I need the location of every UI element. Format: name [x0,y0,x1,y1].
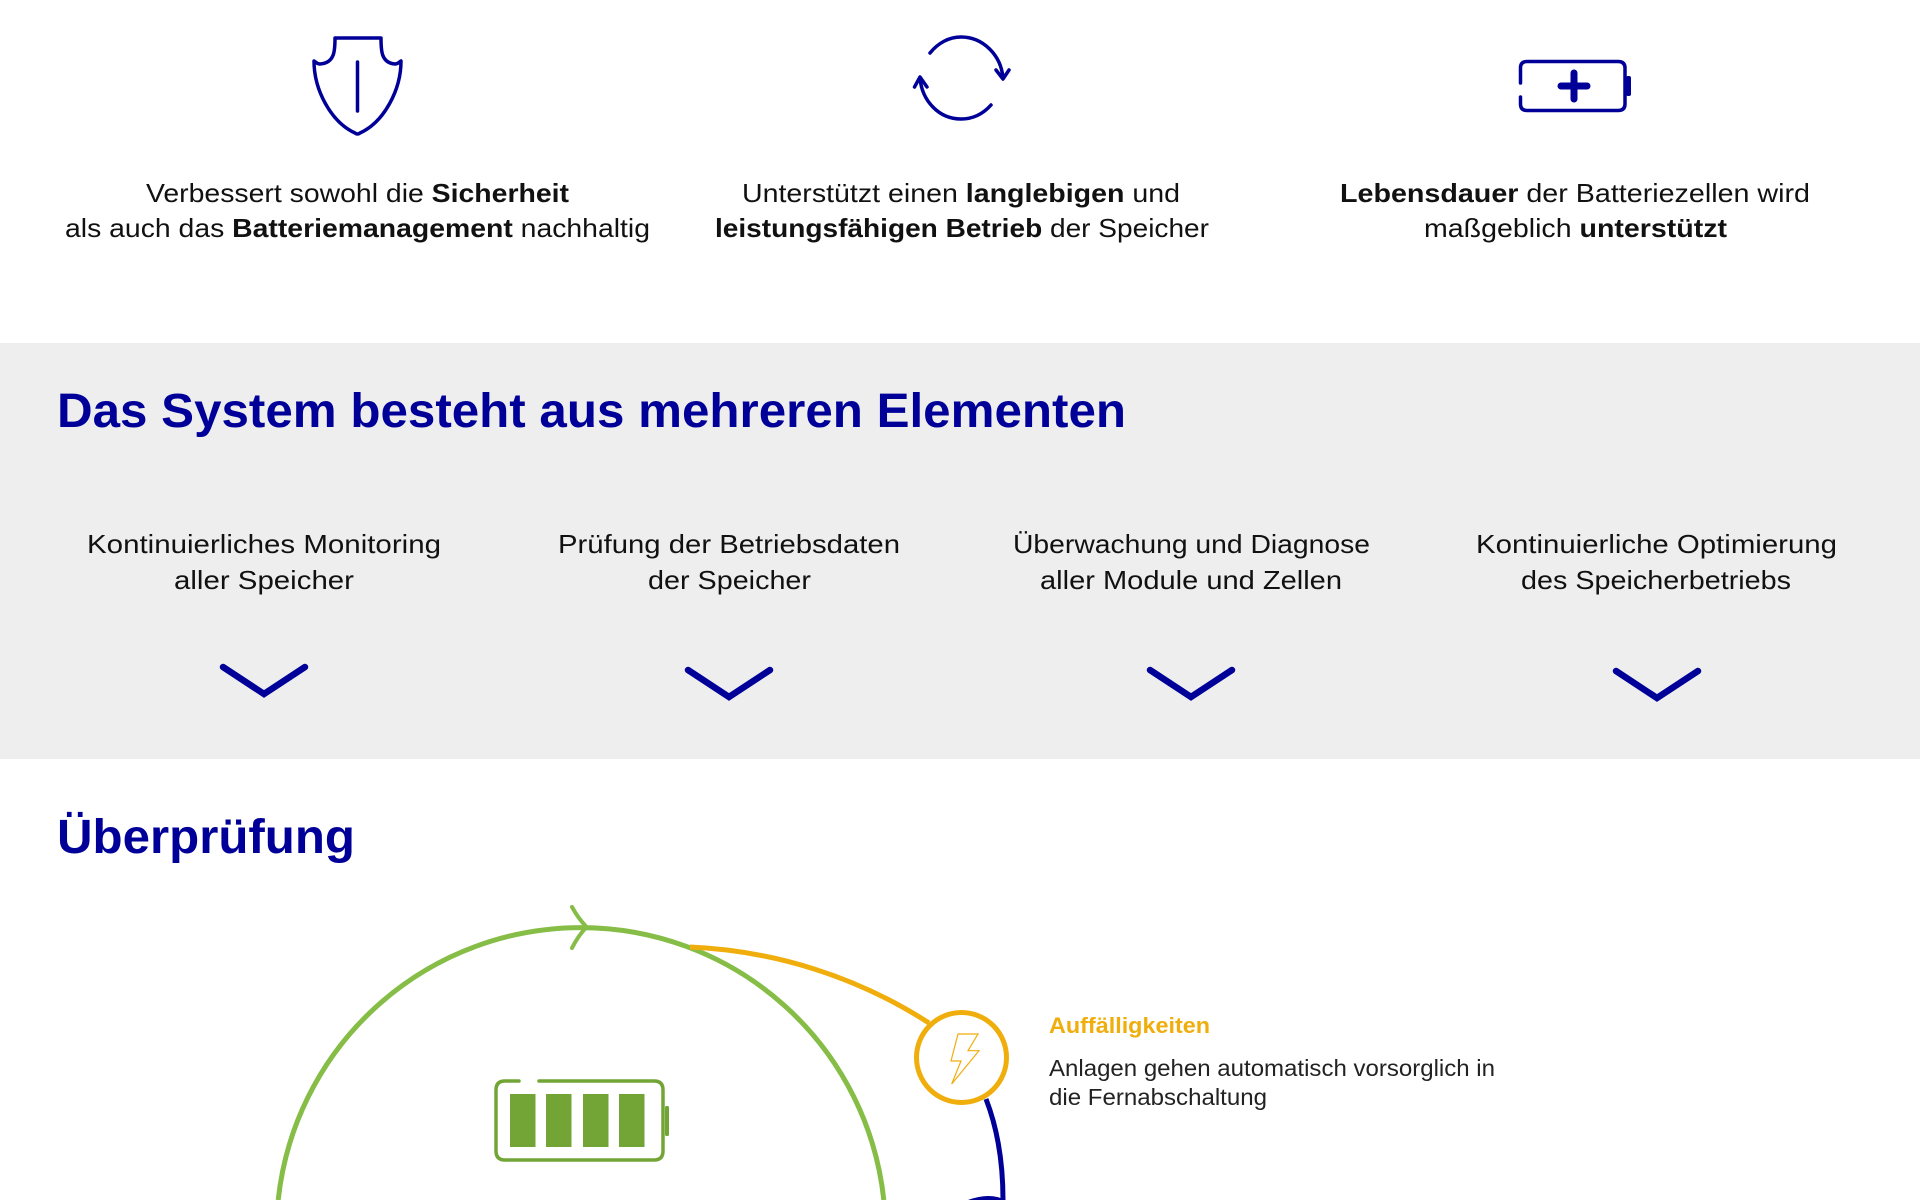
text: Lebensdauer: Lebensdauer der Batteriezellen wird [1340,178,1810,208]
callout: Auffälligkeiten [1049,1013,1495,1110]
element 3: diagnose [1013,529,1370,595]
icon: chevron 1 [223,667,305,694]
yellow node with lightning [916,1012,1006,1102]
text: Sicherheit: als auch das Batteriemanagement nachhaltig [65,213,650,243]
element 2: betriebsdaten: der Speicher [648,565,811,595]
main green circle [278,928,884,1200]
blue branch [986,1099,1003,1200]
yellow branch [690,947,929,1023]
icon: green battery [496,1081,669,1160]
icon: chevron 4 [1616,671,1698,698]
element 1: monitoring: Kontinuierliches Monitoring [87,529,441,559]
green arrowhead [572,907,586,948]
callout: Auffälligkeiten: Anlagen gehen automatisch vorsorglich in [1049,1055,1495,1081]
element 2: betriebsdaten [558,529,900,595]
callout: Auffälligkeiten: Auffälligkeiten [1049,1013,1210,1038]
text: Lebensdauer [1340,178,1810,243]
icon: chevron 3 [1150,670,1232,697]
icon: refresh arrows [914,37,1009,119]
text: Lebensdauer: maßgeblich unterstützt [1424,213,1727,243]
text: langlebiger Betrieb: Unterstützt einen langlebigen und [742,178,1180,208]
text: langlebiger Betrieb: leistungsfähigen Betrieb der Speicher [715,213,1209,243]
icon: shield [314,38,401,134]
text: Sicherheit: Verbessert sowohl die Sicherheit [146,178,569,208]
element 4: optimierung: Kontinuierliche Optimierung [1476,529,1837,559]
panel: system elements [0,343,1920,759]
callout: Auffälligkeiten: die Fernabschaltung [1049,1084,1267,1110]
element 2: betriebsdaten: Prüfung der Betriebsdaten [558,529,900,559]
blue node top [968,1196,1006,1200]
text: Sicherheit [65,178,650,243]
heading: Überprüfung: Überprüfung [57,811,355,864]
text: langlebiger Betrieb [715,178,1209,243]
element 3: diagnose: Überwachung und Diagnose [1013,529,1370,559]
element 3: diagnose: aller Module und Zellen [1040,565,1342,595]
heading: system elements: Das System besteht aus mehreren Elementen [57,385,1126,438]
element 1: monitoring [87,529,441,595]
icon: battery plus [1520,62,1631,110]
element 4: optimierung: des Speicherbetriebs [1521,565,1791,595]
icon: chevron 2 [688,670,770,697]
element 1: monitoring: aller Speicher [174,565,354,595]
element 4: optimierung [1476,529,1837,595]
chart: monitoring cycle [278,907,1006,1200]
